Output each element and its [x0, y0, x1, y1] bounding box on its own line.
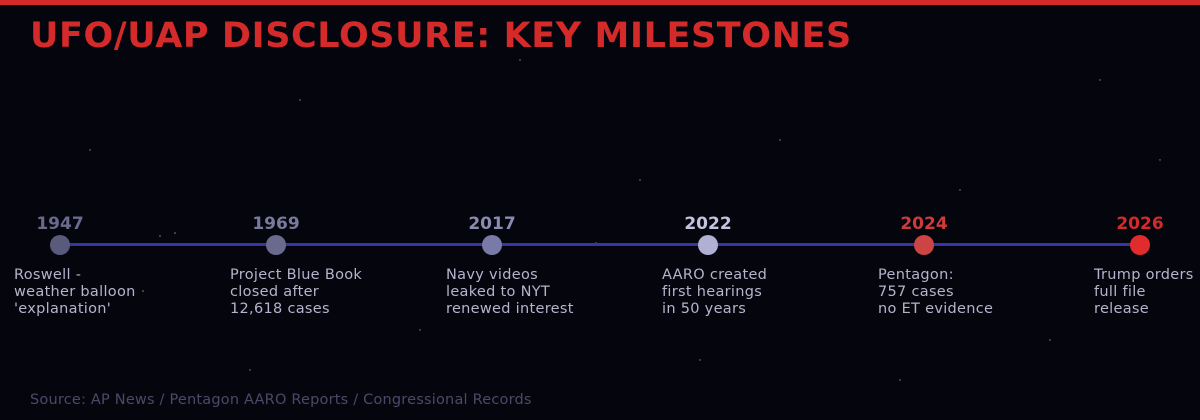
milestone 1947 [14, 214, 136, 317]
milestone 2026: full file [1094, 284, 1146, 300]
milestone 2017: renewed interest [446, 301, 574, 317]
milestone 1947: Roswell - [14, 267, 81, 283]
milestone 1969: 12,618 cases [230, 301, 330, 317]
milestone 2022: 2022 [684, 214, 732, 234]
milestone 2017 [446, 214, 574, 317]
milestone 2024: Pentagon: [878, 267, 954, 283]
milestone 1969: closed after [230, 284, 319, 300]
milestone 1947: 'explanation' [14, 301, 111, 317]
milestone 2024: 2024 [900, 214, 948, 234]
milestone 2022 [662, 214, 767, 317]
top bar [0, 0, 1200, 5]
milestone 2022: in 50 years [662, 301, 746, 317]
milestone 1969: 1969 [252, 214, 300, 234]
source: Source: AP News / Pentagon AARO Reports / Congressional Records [30, 392, 532, 408]
title: UFO/UAP DISCLOSURE: KEY MILESTONES [30, 16, 852, 56]
milestone 2024 [878, 214, 993, 317]
milestone 1969 [230, 214, 362, 317]
milestone 2024: no ET evidence [878, 301, 993, 317]
milestone 1969: Project Blue Book [230, 267, 362, 283]
milestone 2026 [1094, 214, 1194, 317]
milestone 1947: weather balloon [14, 284, 136, 300]
milestone 2017: 2017 [468, 214, 516, 234]
timeline line [60, 243, 1140, 246]
milestone 2026: 2026 [1116, 214, 1164, 234]
milestone 2024: 757 cases [878, 284, 954, 300]
milestone 2017: leaked to NYT [446, 284, 550, 300]
milestone 2022: AARO created [662, 267, 767, 283]
milestone 1947: 1947 [36, 214, 84, 234]
milestone 2026: Trump orders [1094, 267, 1194, 283]
milestone 2026: release [1094, 301, 1149, 317]
milestone 2017: Navy videos [446, 267, 538, 283]
milestone 2022: first hearings [662, 284, 762, 300]
